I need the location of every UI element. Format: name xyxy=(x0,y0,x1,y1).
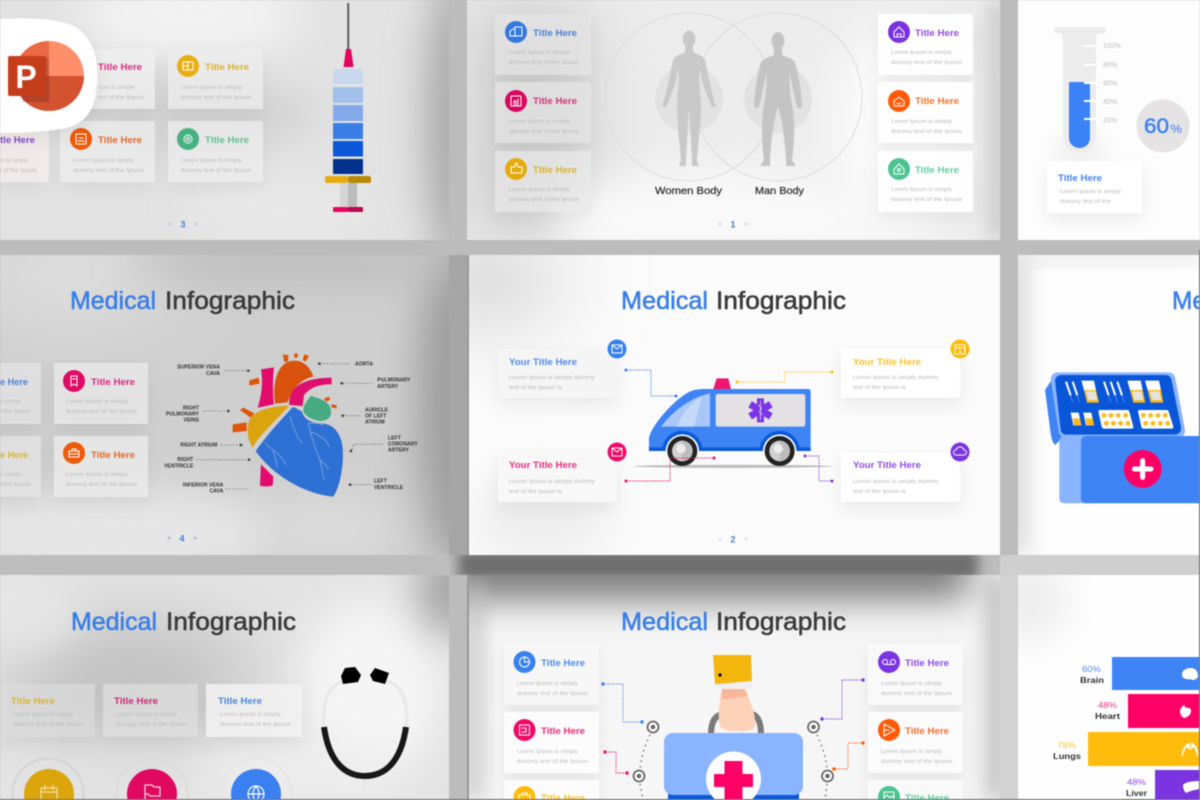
info card: purple: text of the Ipsum is xyxy=(853,489,906,495)
info card: orange: Lorem Ipsum is simply xyxy=(73,158,134,164)
callout labels: AORTA xyxy=(355,362,373,368)
callout labels: ARTERY xyxy=(377,384,399,390)
icon: female body xyxy=(662,30,716,166)
callout labels: CAVA xyxy=(209,489,224,495)
info card: blue: Your Title Here xyxy=(509,357,577,368)
bar: heart 48%: 48% xyxy=(1098,701,1117,710)
info card: orange: Lorem Ipsum is simply xyxy=(66,472,128,478)
icon: medical plus xyxy=(1124,450,1162,488)
callout labels: OF LEFT xyxy=(365,413,387,419)
info card: yellow: text of the Ipsum is xyxy=(853,385,906,391)
info card: yellow: Lorem Ipsum is simply dummy xyxy=(853,375,939,381)
info card: magenta: Lorem Ipsum is simply xyxy=(116,712,177,718)
icon: magenta badge xyxy=(608,442,626,462)
info card: blue xyxy=(504,644,599,705)
info card: magenta: ext of the Ipsum xyxy=(98,95,144,101)
info card: magenta: Title Here xyxy=(98,62,142,73)
backdrop gutters xyxy=(449,255,1199,799)
callout labels xyxy=(164,362,418,495)
info card: yellow: dummy text of the Ipsum xyxy=(181,95,251,101)
title: Medical xyxy=(621,608,708,636)
info card: blue xyxy=(498,340,626,398)
icon: orange badge xyxy=(70,128,92,150)
info card: yellow xyxy=(168,49,263,109)
info card: magenta xyxy=(54,363,148,424)
info card: purple: Lorem Ipsum is simply xyxy=(881,681,942,687)
info card: yellow xyxy=(495,151,591,212)
heart illustration xyxy=(233,353,343,497)
callout: 60 percent: % xyxy=(1170,122,1182,136)
info card: yellow: dummy text of the Ipsum xyxy=(13,722,84,728)
info card: purple: Title Here xyxy=(905,658,949,669)
icon: flag medallion xyxy=(116,758,188,800)
callout labels: RIGHT ATRIUM xyxy=(180,442,217,448)
pagination: 2: 2 xyxy=(730,534,736,544)
info card: green: Lorem Ipsum is simply xyxy=(891,187,952,193)
info card: magenta: dummy text of the Ipsum xyxy=(517,759,588,765)
info card: magenta: Lorem Ipsum is simply xyxy=(517,749,578,755)
info card: orange: Lorem Ipsum is simply xyxy=(891,119,952,125)
axis labels: 60% xyxy=(1103,80,1117,88)
info card: yellow: Title Here xyxy=(205,62,249,73)
info card: purple xyxy=(878,14,973,75)
info card: green: Lorem Ipsum is simply xyxy=(181,158,242,164)
info card: orange: dummy text of the Ipsum xyxy=(891,129,962,135)
connector: yellow xyxy=(736,370,834,384)
pagination: 2 xyxy=(718,534,748,544)
info card: magenta: dummy text of the Ipsum xyxy=(116,722,187,728)
info card: purple: Title Here xyxy=(915,28,959,39)
pagination: 4: 4 xyxy=(179,534,185,544)
info card: purple xyxy=(841,442,970,502)
info card: blue: dummy text of the Ipsum xyxy=(517,691,588,697)
diagram: labelled heart xyxy=(164,353,418,497)
wheel: rear xyxy=(667,436,697,466)
callout labels: AURICLE xyxy=(365,407,388,413)
info card: yellow: Lorem Ipsum is simply xyxy=(181,85,242,91)
callout: 60 percent: 60 xyxy=(1144,115,1169,138)
info card: test tube: dummy text of the xyxy=(1060,199,1111,205)
logo: PowerPoint: P xyxy=(15,59,37,95)
chart: women and man venn xyxy=(605,13,862,197)
icon: magenta badge xyxy=(505,90,527,112)
callout labels: PULMONARY xyxy=(166,411,200,417)
info card: orange: Title Here xyxy=(915,96,959,107)
icon: orange badge xyxy=(63,442,85,464)
icon: medicine kit xyxy=(1045,372,1200,503)
callout labels: PULMONARY xyxy=(377,378,411,384)
panel: medicine kit slide xyxy=(1010,250,1200,555)
info card: blue: dummy text of the Ipsum xyxy=(220,722,291,728)
panel: body comparison slide (slide 1) xyxy=(466,0,1000,240)
pagination: 3: 3 xyxy=(180,220,186,230)
info card: blue: e Here xyxy=(0,377,28,388)
info card: blue xyxy=(206,684,302,737)
info card: yellow: dummy text of the Ipsum xyxy=(509,197,579,203)
info card: magenta: sum is simply xyxy=(98,85,135,91)
dotted arcs and target nodes xyxy=(634,722,833,800)
info card: green: Title Here xyxy=(205,135,249,146)
panel: test tube slide xyxy=(1018,0,1200,240)
icon: male body xyxy=(754,32,802,166)
info card: blue: s simply xyxy=(0,399,21,405)
bar: liver 48%: Liver xyxy=(1126,788,1148,798)
callout labels: ATRIUM xyxy=(365,419,385,425)
info card: purple: Lorem Ipsum is simply dummy xyxy=(853,479,939,485)
icon: blue badge xyxy=(505,21,527,43)
info card: test tube xyxy=(1047,161,1142,213)
info card: orange: dummy text of the Ipsum xyxy=(881,759,952,765)
callout labels: RIGHT xyxy=(177,457,194,463)
axis labels xyxy=(1103,43,1121,124)
callout labels: CAVA xyxy=(206,371,220,377)
info card: magenta: Title Here xyxy=(533,96,577,107)
icon: brain xyxy=(1182,668,1198,680)
kit contents xyxy=(1066,381,1173,429)
info card: yellow: Title Here xyxy=(11,696,55,707)
info card: yellow: Lorem Ipsum is simply xyxy=(13,712,74,718)
bar: lungs 79% xyxy=(1053,732,1200,766)
info card: blue xyxy=(495,14,591,75)
axis labels: 40% xyxy=(1103,99,1117,106)
info card: magenta xyxy=(504,712,599,773)
icon: yellow badge xyxy=(505,158,527,180)
icon: magenta badge xyxy=(63,370,85,392)
info card: magenta: dummy text of the Ipsum xyxy=(66,409,137,415)
info card: magenta: Title Here xyxy=(114,696,158,707)
info card: yellow: Title Here xyxy=(533,165,577,176)
info card: blue xyxy=(0,363,41,424)
icon: orange badge xyxy=(888,90,910,112)
callout labels: VEINS xyxy=(184,417,200,423)
info card: magenta xyxy=(495,82,591,143)
axis labels: 100% xyxy=(1103,43,1121,50)
callout labels: SUPERIOR VENA xyxy=(177,365,220,371)
title: Infographic xyxy=(166,608,296,636)
info card: purple: tle Here xyxy=(0,135,35,146)
icon: green badge xyxy=(177,128,199,150)
info card: yellow xyxy=(841,340,970,398)
info card: yellow xyxy=(0,436,41,497)
title: Infographic xyxy=(165,287,295,315)
icon: blue badge xyxy=(514,651,536,673)
title: Infographic xyxy=(716,287,846,315)
info card: magenta: text of the Ipsum is xyxy=(509,489,562,495)
info card: purple: dummy text of the Ipsum xyxy=(881,691,952,697)
title: Medical xyxy=(71,608,157,636)
icon: green badge xyxy=(878,786,900,800)
axis labels: 80% xyxy=(1103,62,1117,69)
icon: stethoscope xyxy=(323,667,407,800)
info card: yellow: s simply xyxy=(0,472,21,478)
info card: orange: dummy text of the Ipsum xyxy=(66,482,137,488)
callout labels: CORONARY xyxy=(388,442,418,448)
connector: blue xyxy=(601,682,644,724)
connector: purple xyxy=(804,454,834,482)
info card: orange xyxy=(878,82,973,143)
info card: magenta xyxy=(60,49,155,109)
bar: lungs 79%: 79% xyxy=(1057,741,1076,750)
info card: magenta xyxy=(498,442,626,502)
info card: orange: Title Here xyxy=(91,450,135,461)
callout labels: VENTRICLE xyxy=(374,485,404,491)
bar: heart 48% xyxy=(1095,694,1200,728)
panel: stethoscope slide xyxy=(0,574,450,800)
icon: purple badge xyxy=(888,21,910,43)
panel: ambulance slide (slide 2) xyxy=(466,254,1000,556)
info card: orange: Lorem Ipsum is simply xyxy=(881,749,942,755)
title: Medical xyxy=(70,287,156,315)
bar: brain 60% xyxy=(1080,657,1200,690)
info card: blue: Lorem Ipsum is simply xyxy=(220,712,281,718)
info card: test tube: Title Here xyxy=(1058,173,1102,184)
label: women body: Women Body xyxy=(655,186,722,197)
icon: purple badge xyxy=(950,442,970,462)
info card: green xyxy=(168,121,263,182)
info card: green: dummy text of the Ipsum xyxy=(181,168,251,174)
info card: purple: dummy text of the Ipsum xyxy=(891,60,962,66)
bar: heart 48%: Heart xyxy=(1095,711,1120,721)
info card: yellow xyxy=(0,684,95,737)
icon: liver xyxy=(1183,781,1200,793)
info card: magenta: Title Here xyxy=(91,377,135,388)
panel: syringe slide (slide 3) xyxy=(0,0,448,240)
title: Medical xyxy=(621,287,708,315)
pagination: 1 xyxy=(718,220,748,230)
connector: blue xyxy=(624,368,678,398)
logo: PowerPoint xyxy=(0,18,97,133)
info card: blue: Title Here xyxy=(218,696,262,707)
icon: heart xyxy=(1180,705,1191,718)
info card: blue: dummy text of the Ipsum xyxy=(509,60,579,66)
info card: magenta: Lorem Ipsum is simply dummy xyxy=(509,479,595,485)
icon: hand carrying first aid case xyxy=(664,655,803,800)
info card: magenta: dummy text of the Ipsum xyxy=(509,129,579,135)
wheel: front xyxy=(765,436,795,466)
pagination: 4 xyxy=(168,534,196,544)
pagination: 3 xyxy=(168,220,198,230)
info card: purple xyxy=(868,644,963,705)
connector: magenta xyxy=(603,750,629,775)
connector: orange xyxy=(832,741,865,771)
bar: lungs 79%: Lungs xyxy=(1053,751,1081,761)
icon: yellow badge xyxy=(177,55,199,77)
info card: green xyxy=(868,780,963,800)
icon: lungs xyxy=(1182,743,1198,757)
info card: yellow xyxy=(504,780,599,800)
icon: calendar medallion xyxy=(12,758,84,800)
info card: magenta: Title Here xyxy=(541,726,585,737)
icon: blue badge xyxy=(608,340,626,358)
chart: test tube at 60% xyxy=(1052,27,1121,164)
info card: magenta xyxy=(103,684,198,737)
info card: yellow: e Here xyxy=(0,450,28,461)
info card: orange xyxy=(60,121,155,182)
info card: blue: Title Here xyxy=(541,658,585,669)
icon: purple badge xyxy=(878,651,900,673)
info card: green xyxy=(878,151,973,212)
connector: purple xyxy=(820,678,865,721)
callout labels: ARTERY xyxy=(388,448,410,454)
icon: orange badge xyxy=(878,719,900,741)
title: Infographic xyxy=(716,608,846,636)
info card: yellow: Your Title Here xyxy=(853,357,921,368)
info card: orange: Title Here xyxy=(905,726,949,737)
callout labels: LEFT xyxy=(388,435,402,441)
info card: purple: m is simply xyxy=(0,158,28,164)
icon: yellow badge xyxy=(950,340,970,358)
bar: liver 48% xyxy=(1126,770,1200,800)
info card: purple: Your Title Here xyxy=(853,460,921,471)
icon: star of life xyxy=(748,398,773,422)
icon: green badge xyxy=(888,158,910,180)
callout labels: INFERIOR VENA xyxy=(183,482,224,488)
info card: orange: dummy text of the Ipsum xyxy=(73,168,144,174)
axis labels: 20% xyxy=(1103,118,1117,124)
info card: yellow: Lorem Ipsum is simply xyxy=(509,187,570,193)
info card: magenta: Lorem Ipsum is simply xyxy=(509,119,570,125)
info card: orange xyxy=(54,436,148,497)
info card: blue: Lorem Ipsum is simply dummy xyxy=(509,375,595,381)
info card: purple: t of the Ipsum xyxy=(0,168,37,174)
callout labels: RIGHT xyxy=(183,405,200,411)
info card: blue: f the Ipsum xyxy=(0,409,31,415)
info card: purple: Lorem Ipsum is simply xyxy=(891,50,952,56)
pagination: 1: 1 xyxy=(730,220,736,230)
icon: magenta badge xyxy=(514,719,536,741)
icon: ambulance xyxy=(633,378,832,471)
bar: liver 48%: 48% xyxy=(1127,778,1146,787)
info card: magenta: Your Title Here xyxy=(509,460,577,471)
info card: blue: Lorem Ipsum is simply xyxy=(509,50,570,56)
info card: green: Title Here xyxy=(915,165,959,176)
bar: brain 60%: 60% xyxy=(1082,665,1101,674)
info card: test tube: Lorem Ipsum is simply xyxy=(1060,189,1121,195)
frame edge xyxy=(0,250,1200,800)
bar: brain 60%: Brain xyxy=(1080,675,1104,685)
info card: blue: text of the Ipsum is xyxy=(509,385,562,391)
icon: globe medallion xyxy=(220,758,292,800)
callout labels: LEFT xyxy=(374,479,388,485)
info card: purple xyxy=(0,121,49,182)
info card: green: dummy text of the Ipsum xyxy=(891,197,962,203)
info card: magenta: Lorem Ipsum is simply xyxy=(66,399,128,405)
info card: blue: Title Here xyxy=(533,28,577,39)
label: man body: Man Body xyxy=(755,186,804,197)
callout: 60 percent xyxy=(1136,100,1190,152)
callout labels: VENTRICLE xyxy=(164,463,194,469)
icon: syringe xyxy=(325,3,371,212)
icon: yellow badge xyxy=(514,786,536,800)
connector: magenta xyxy=(624,456,716,482)
panel: heart slide (slide 4) xyxy=(0,254,450,556)
info card: orange xyxy=(868,712,963,773)
info card: blue: Lorem Ipsum is simply xyxy=(517,681,578,687)
info card: orange: Title Here xyxy=(98,135,142,146)
panel: organ bars slide xyxy=(1018,574,1200,800)
panel: first aid slide xyxy=(466,574,1000,800)
info card: yellow: f the Ipsum xyxy=(0,482,31,488)
